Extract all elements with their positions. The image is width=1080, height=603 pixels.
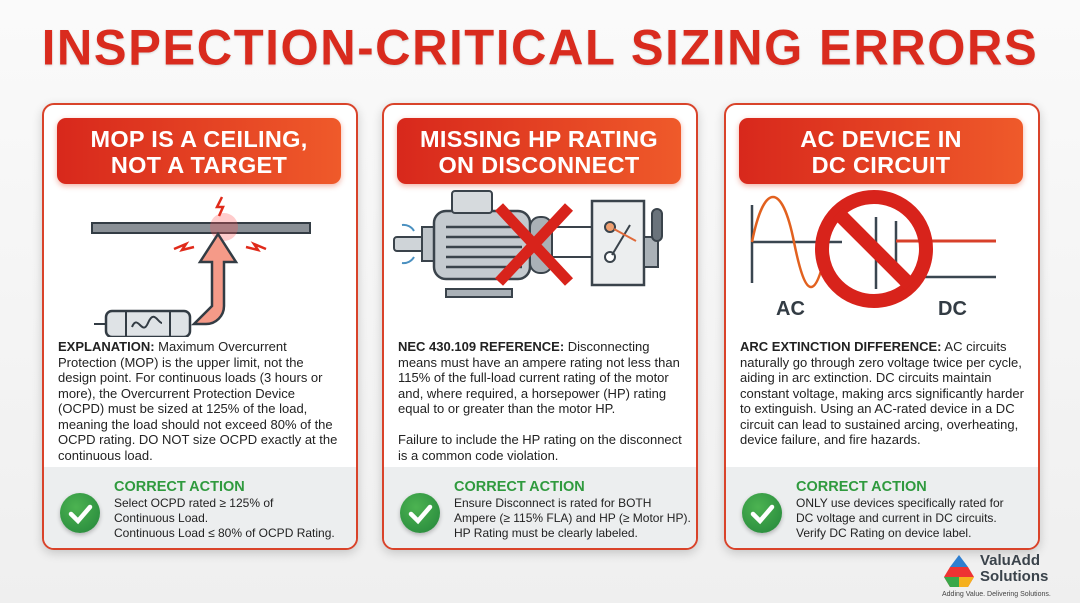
heading xyxy=(739,118,1023,184)
heading: NOT A TARGET xyxy=(111,152,287,178)
icon: check xyxy=(742,493,782,533)
correct action: HP Rating must be clearly labeled. xyxy=(454,526,638,540)
correct action: DC voltage and current in DC circuits. xyxy=(796,511,997,525)
logo: Adding Value. Delivering Solutions. xyxy=(942,591,1051,598)
illustration: AC/DC with prohibition sign: AC xyxy=(776,298,805,320)
heading: MISSING HP RATING xyxy=(420,126,658,152)
icon: check xyxy=(400,493,440,533)
correct action: CORRECT ACTION xyxy=(796,479,927,495)
panel: MOP ceiling xyxy=(42,103,358,550)
illustration: motor, X, disconnect xyxy=(393,190,663,298)
title: INSPECTION-CRITICAL SIZING ERRORS xyxy=(42,20,1038,76)
correct action xyxy=(384,467,696,550)
heading xyxy=(397,118,681,184)
panel: missing HP rating xyxy=(382,103,698,550)
correct action: Ampere (≥ 115% FLA) and HP (≥ Motor HP). xyxy=(454,511,691,525)
logo: ValuAdd xyxy=(980,552,1040,569)
heading: MOP IS A CEILING, xyxy=(90,126,308,152)
correct action: Continuous Load. xyxy=(114,511,208,525)
illustration: ceiling and fuse arrow xyxy=(91,196,311,337)
logo xyxy=(942,552,1051,598)
correct action xyxy=(726,467,1038,550)
panel: AC device in DC xyxy=(724,103,1040,550)
correct action: ONLY use devices specifically rated for xyxy=(796,496,1004,510)
reference text: Failure to include the HP rating on the disconnect is a common code violation. xyxy=(398,432,682,462)
heading: ON DISCONNECT xyxy=(438,152,640,178)
reference text xyxy=(398,339,682,462)
heading: AC DEVICE IN xyxy=(800,126,962,152)
arc extinction text: ARC EXTINCTION DIFFERENCE: AC circuits naturally go through zero voltage twice per cycle, aiding in arc extinction. DC circuits maintain constant voltage, making arcs significantly harder to extinguish. Using an AC-rated device in a DC circuit can lead to sustained arcing, overheating, device failure, and fire hazards. xyxy=(740,339,1024,447)
correct action: Verify DC Rating on device label. xyxy=(796,526,971,540)
correct action: CORRECT ACTION xyxy=(454,479,585,495)
icon: check xyxy=(60,493,100,533)
explanation text: EXPLANATION: Maximum Overcurrent Protection (MOP) is the upper limit, not the design point. For continuous loads (3 hours or more), the Overcurrent Protection Device (OCPD) must be sized at 125% of the load, meaning the load should not exceed 80% of the OCPD rating. DO NOT size OCPD exactly at the continuous load. xyxy=(58,339,337,462)
illustration: AC/DC with prohibition sign xyxy=(750,190,996,320)
correct action: Ensure Disconnect is rated for BOTH xyxy=(454,496,651,510)
correct action: Continuous Load ≤ 80% of OCPD Rating. xyxy=(114,526,335,540)
heading: DC CIRCUIT xyxy=(812,152,950,178)
logo: Solutions xyxy=(980,568,1048,585)
correct action: CORRECT ACTION xyxy=(114,479,245,495)
reference text: NEC 430.109 REFERENCE: Disconnecting means must have an ampere rating not less than 115% of the full-load current rating of the motor and, where required, a horsepower (HP) rating equal to or greater than the motor HP. xyxy=(398,339,680,416)
correct action: Select OCPD rated ≥ 125% of xyxy=(114,496,273,510)
illustration: AC/DC with prohibition sign: DC xyxy=(938,298,967,320)
correct action xyxy=(44,467,356,550)
heading xyxy=(57,118,341,184)
